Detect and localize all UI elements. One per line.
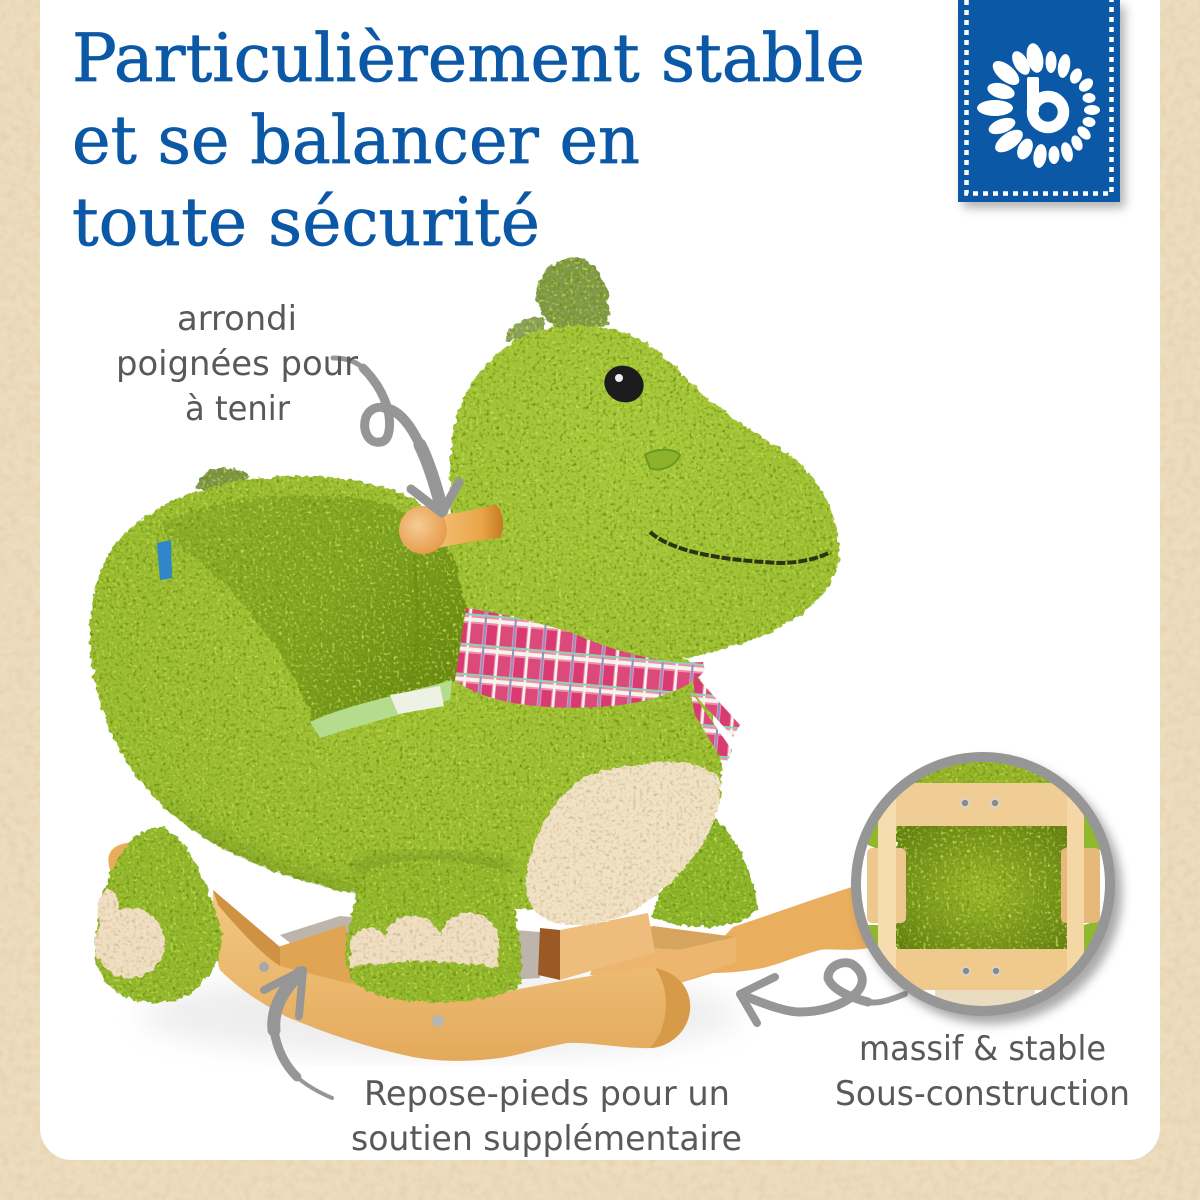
wooden handle <box>399 505 503 554</box>
icon: flower <box>977 42 1100 169</box>
back rocker tip <box>108 842 160 890</box>
cream belly <box>935 990 1035 1006</box>
brand logo tag <box>958 0 1125 208</box>
scarf tails <box>690 672 740 762</box>
rear rocker rail <box>680 887 868 983</box>
label: handles: arrondi <box>177 299 297 339</box>
arrow: base <box>740 963 905 1023</box>
title: toute sécurité <box>72 184 540 261</box>
wooden support block <box>538 913 655 980</box>
eye <box>598 359 650 409</box>
seat interior <box>158 495 466 738</box>
front foot pad <box>350 913 499 968</box>
title <box>72 20 865 261</box>
label: footrest <box>351 1074 742 1159</box>
footrest gap shadow <box>280 916 540 990</box>
back foot pad <box>95 890 165 978</box>
nostril <box>645 450 680 469</box>
front foot contact shadow <box>350 852 514 880</box>
title: Particulièrement stable <box>72 20 865 97</box>
label: handles: poignées pour <box>116 344 358 384</box>
bottom cross bar <box>896 949 1067 990</box>
label: footrest: Repose-pieds pour un <box>364 1074 730 1114</box>
label: base <box>835 1029 1130 1114</box>
dino head spike <box>536 258 609 330</box>
front rocker rail <box>213 890 690 1061</box>
dino head <box>450 325 839 659</box>
inset: underside detail <box>850 750 1122 1024</box>
inset ring <box>856 757 1110 1011</box>
rocking horse product <box>90 258 868 1061</box>
far foot <box>652 818 757 927</box>
side blocks <box>867 848 906 923</box>
wooden footrest plank <box>278 925 360 990</box>
plush body <box>90 476 721 909</box>
front foot <box>346 860 521 1002</box>
title: et se balancer en <box>72 102 640 179</box>
dino spike rear <box>196 468 250 492</box>
vertical slats <box>878 795 896 975</box>
label: base: Sous-construction <box>835 1074 1130 1114</box>
screws <box>259 962 269 972</box>
top cross bar <box>896 783 1067 826</box>
scarf <box>455 608 705 708</box>
wooden base plank <box>590 926 736 983</box>
arrow: footrest <box>264 970 332 1098</box>
body underside shading <box>158 800 362 894</box>
mouth <box>650 532 830 563</box>
floor shadow <box>140 973 740 1057</box>
seat inner crease <box>410 555 417 688</box>
belt buckle <box>390 686 444 714</box>
belly patch <box>526 762 720 925</box>
label: handles: à tenir <box>185 389 290 429</box>
icon: letter b <box>1027 77 1064 128</box>
label: handles <box>116 299 358 429</box>
seat belt <box>310 680 452 738</box>
label: base: massif & stable <box>859 1029 1106 1069</box>
plush underside <box>896 762 1052 832</box>
rocker end shade <box>650 968 690 1048</box>
second spike <box>505 317 545 345</box>
screws <box>961 799 1000 975</box>
rocker top edge shade <box>213 890 280 966</box>
back foot <box>95 827 222 1003</box>
label tag <box>157 540 172 580</box>
label: footrest: soutien supplémentaire <box>351 1119 742 1159</box>
arrow: handle <box>333 358 459 513</box>
